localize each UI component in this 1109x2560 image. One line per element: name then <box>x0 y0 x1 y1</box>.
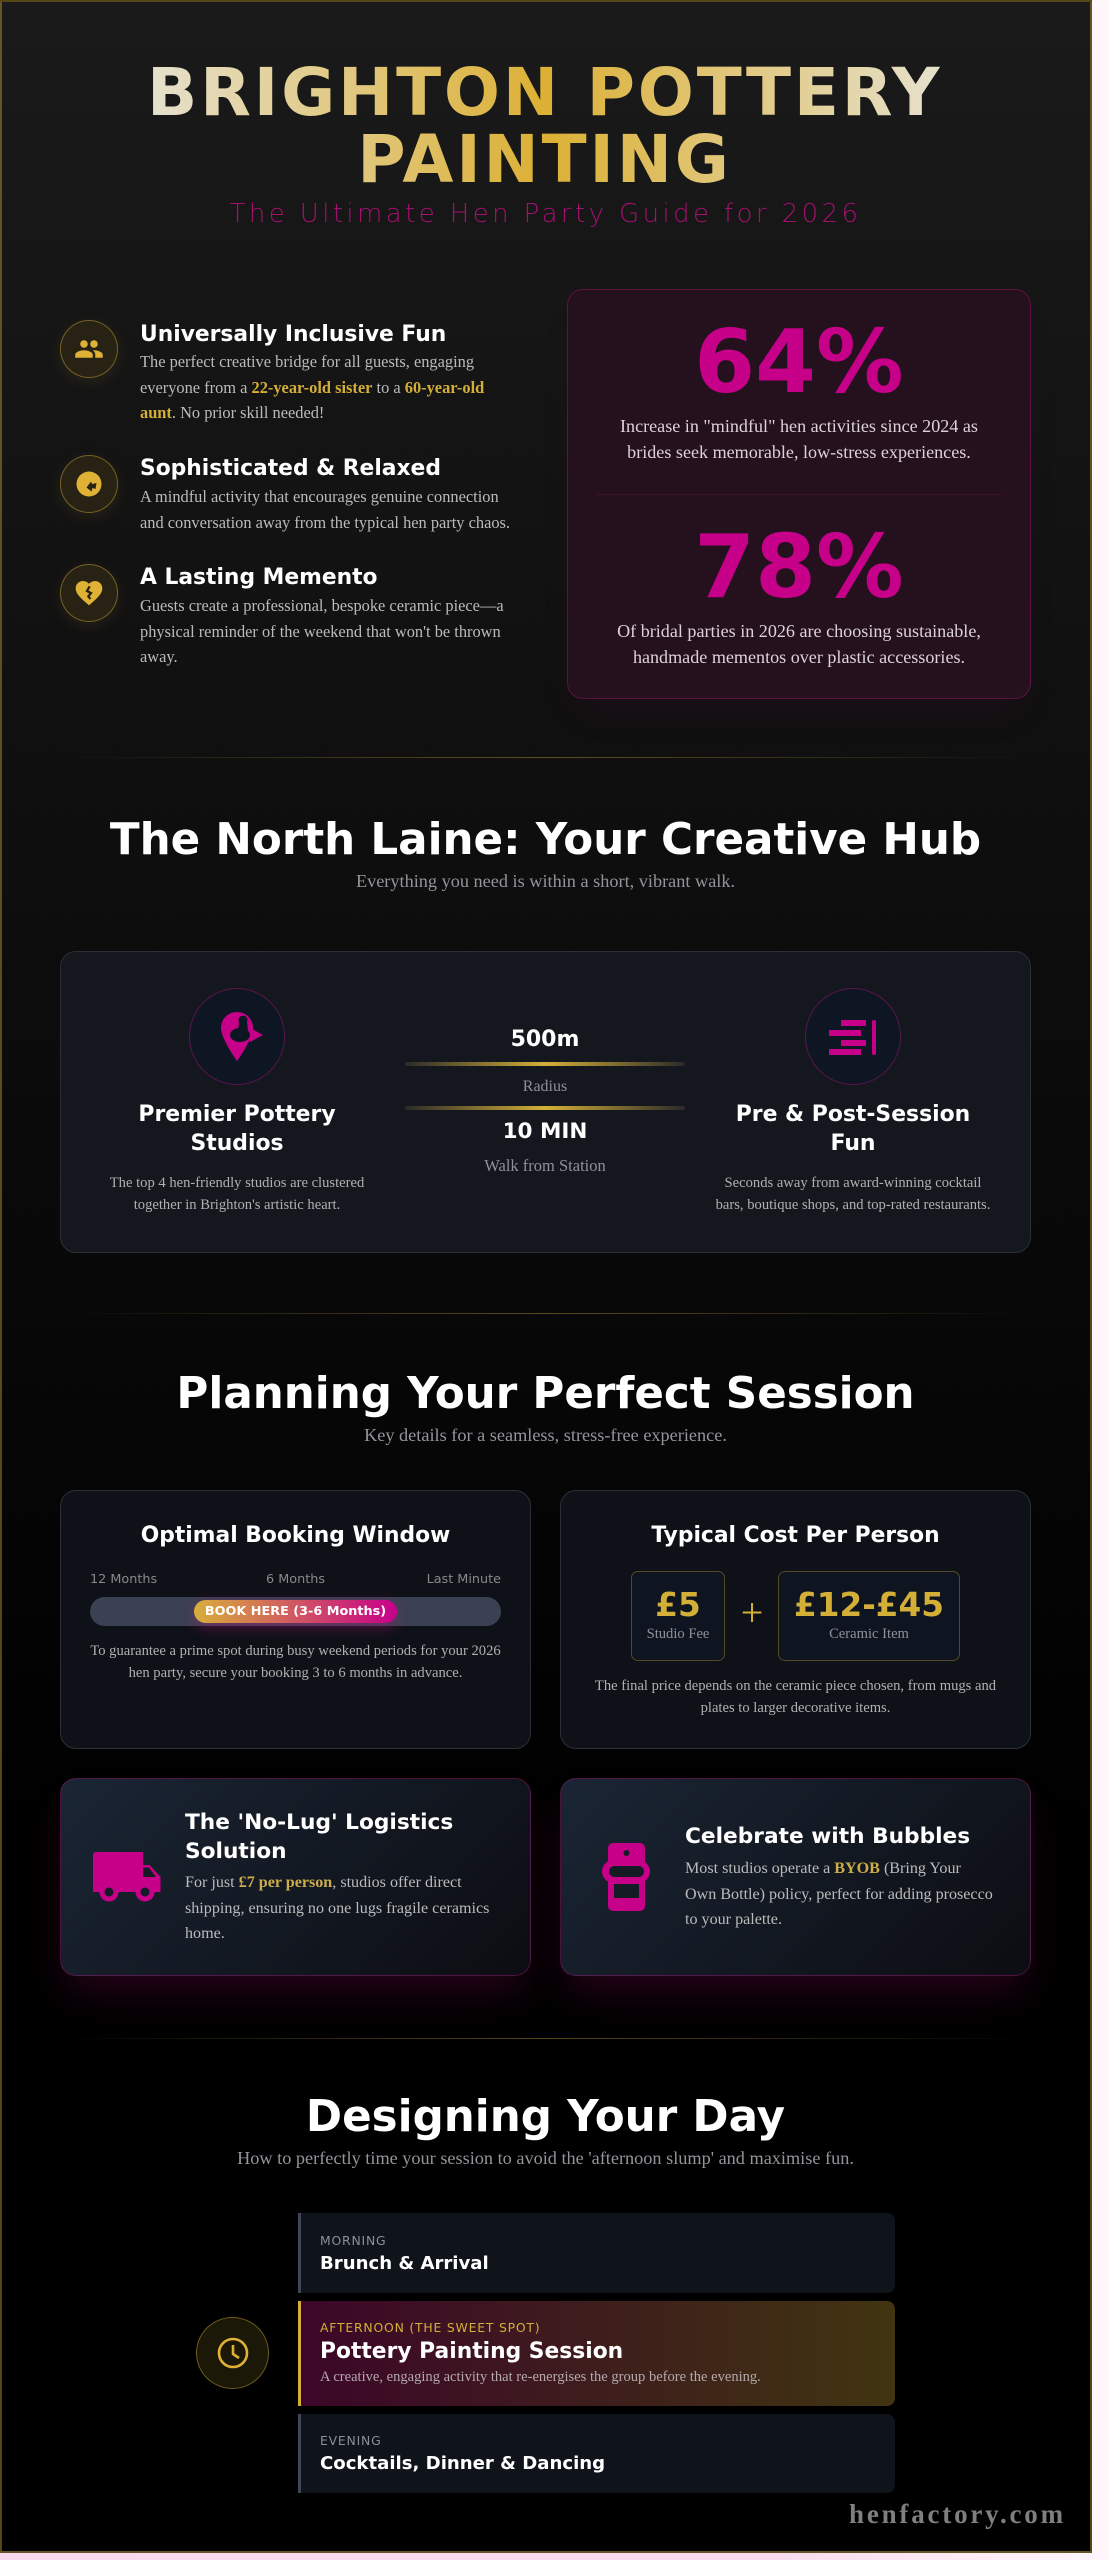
title: Pottery Painting Session <box>320 2339 623 2364</box>
text: The perfect creative bridge for all guests, engaging <box>140 352 474 371</box>
section heading: planning <box>176 1368 915 1445</box>
main title <box>147 59 942 193</box>
heading <box>185 1810 453 1864</box>
benefit: sophisticated and relaxed <box>60 455 510 532</box>
heading: studios: Studios <box>190 1131 284 1156</box>
timeline labels <box>90 1572 501 1587</box>
subtitle: The Ultimate Hen Party Guide for 2026 <box>230 199 861 229</box>
benefit: a lasting memento <box>60 564 504 666</box>
explanation: The final price depends on the ceramic piece chosen, from mugs and <box>595 1678 996 1694</box>
text: For just £7 per person, studios offer direct <box>185 1874 462 1891</box>
heading: studios <box>138 1102 336 1156</box>
timeline item: afternoon <box>298 2301 895 2406</box>
heading: fun: Fun <box>830 1131 876 1156</box>
explanation: plates to larger decorative items. <box>701 1700 890 1716</box>
title: Cocktails, Dinner & Dancing <box>320 2452 605 2474</box>
icon: venue menu <box>805 988 901 1085</box>
panel: cost per person <box>560 1490 1031 1749</box>
text: fun <box>716 1175 990 1213</box>
heading: The North Laine: Your Creative Hub <box>110 814 981 864</box>
icon: bottle <box>602 1843 650 1911</box>
main title: BRIGHTON POTTERY <box>147 54 942 131</box>
watermark: henfactory.com <box>849 2499 1066 2529</box>
timeline labels: 12 Months <box>90 1572 157 1587</box>
text: Most studios operate a BYOB (Bring Your <box>685 1860 961 1877</box>
timeline item: evening <box>298 2414 895 2493</box>
section heading: designing <box>237 2092 854 2168</box>
stat text: sustainable: handmade mementos over plastic accessories. <box>633 647 965 667</box>
stat: 78%: 78% <box>694 516 904 618</box>
text: studios: The top 4 hen-friendly studios are clustered <box>110 1175 364 1191</box>
text <box>185 1874 489 1942</box>
ceramic item <box>778 1571 960 1661</box>
title: Brunch & Arrival <box>320 2252 489 2274</box>
studio fee <box>631 1571 725 1661</box>
text: everyone from a 22-year-old sister to a 60-year-old <box>140 378 484 397</box>
heading: A Lasting Memento <box>140 564 378 590</box>
label: walk from station: Walk from Station <box>484 1156 606 1175</box>
panel: logistics <box>60 1778 531 1976</box>
booking highlight <box>194 1600 397 1623</box>
text: and conversation away from the typical hen party chaos. <box>140 513 510 532</box>
label: MORNING <box>320 2232 386 2248</box>
amount: £12-£45 <box>794 1586 944 1624</box>
subheading: How to perfectly time your session to avoid the 'afternoon slump' and maximise fun. <box>237 2148 854 2168</box>
timeline labels: 6 Months <box>266 1572 325 1587</box>
heading: Typical Cost Per Person <box>651 1523 940 1548</box>
amount: £5 <box>655 1586 701 1624</box>
booking highlight: BOOK HERE (3-6 Months) <box>205 1604 386 1619</box>
icon: broken heart <box>60 564 118 622</box>
subheading: Key details for a seamless, stress-free experience. <box>364 1425 727 1445</box>
description: A creative, engaging activity that re-energises the group before the evening. <box>320 2369 761 2385</box>
subheading: Everything you need is within a short, vibrant walk. <box>356 871 735 891</box>
panel: byob <box>560 1778 1031 1976</box>
text: fun: Seconds away from award-winning cocktail <box>725 1175 981 1191</box>
label: radius: Radius <box>523 1078 567 1095</box>
timeline item: morning <box>298 2213 895 2293</box>
explanation <box>595 1678 996 1716</box>
timeline bar <box>90 1597 501 1626</box>
text <box>685 1860 993 1928</box>
heading: The 'No-Lug' Logistics <box>185 1810 453 1835</box>
text: aunt. No prior skill needed! <box>140 403 324 422</box>
icon: truck <box>93 1852 160 1902</box>
label: Studio Fee <box>647 1626 709 1642</box>
text: studios <box>110 1175 364 1213</box>
heading: studios: Premier Pottery <box>138 1102 336 1127</box>
section heading: north laine <box>110 814 981 891</box>
label: Ceramic Item <box>829 1626 909 1642</box>
panel: booking window <box>60 1490 531 1749</box>
stat text: sustainable <box>617 621 981 667</box>
plus: + <box>741 1590 763 1635</box>
explanation: hen party, secure your booking 3 to 6 months in advance. <box>129 1665 462 1681</box>
icon: map pin <box>189 988 285 1085</box>
explanation: To guarantee a prime spot during busy weekend periods for your 2026 <box>90 1643 501 1659</box>
stat text: mindful: brides seek memorable, low-stress experiences. <box>627 442 971 462</box>
heading: Celebrate with Bubbles <box>685 1824 970 1849</box>
heading: Optimal Booking Window <box>141 1523 450 1548</box>
text: fun: bars, boutique shops, and top-rated restaurants. <box>716 1197 990 1213</box>
icon: people <box>60 320 118 378</box>
panel: creative hub <box>60 951 1031 1253</box>
text: studios: together in Brighton's artistic heart. <box>134 1197 340 1213</box>
timeline: day plan <box>196 2213 895 2493</box>
stat: 10 min: 10 MIN <box>503 1119 587 1144</box>
benefit: universally inclusive fun <box>60 320 484 422</box>
label: AFTERNOON (THE SWEET SPOT) <box>320 2320 540 2334</box>
text <box>140 596 504 666</box>
panel: statistics <box>567 289 1031 699</box>
text: physical reminder of the weekend that won't be thrown <box>140 622 501 641</box>
heading: fun <box>736 1102 970 1156</box>
icon: cracked disc <box>60 455 118 513</box>
stat: 64%: 64% <box>694 311 904 413</box>
heading: Designing Your Day <box>306 2092 785 2142</box>
explanation <box>90 1643 501 1681</box>
stat text: sustainable: Of bridal parties in 2026 are choosing sustainable, <box>617 621 981 641</box>
text <box>140 487 510 532</box>
text: Own Bottle) policy, perfect for adding prosecco <box>685 1886 993 1903</box>
icon: clock <box>196 2317 269 2389</box>
text <box>140 352 484 422</box>
heading: Universally Inclusive Fun <box>140 322 446 346</box>
heading: Planning Your Perfect Session <box>176 1368 915 1418</box>
text: A mindful activity that encourages genuine connection <box>140 487 499 506</box>
heading: Solution <box>185 1839 287 1864</box>
heading: fun: Pre & Post-Session <box>736 1102 970 1127</box>
text: Guests create a professional, bespoke ceramic piece—a <box>140 596 504 615</box>
text: shipping, ensuring no one lugs fragile ceramics <box>185 1900 489 1917</box>
timeline labels: Last Minute <box>427 1572 501 1587</box>
main title: PAINTING <box>357 121 732 198</box>
text: home. <box>185 1925 225 1942</box>
text: away. <box>140 647 178 666</box>
stat: 500m: 500m <box>511 1027 579 1052</box>
stat text: mindful <box>620 416 978 462</box>
text: to your palette. <box>685 1911 782 1928</box>
stat text: mindful: Increase in "mindful" hen activities since 2024 as <box>620 416 978 436</box>
heading: Sophisticated & Relaxed <box>140 456 441 481</box>
title header <box>147 54 942 229</box>
label: EVENING <box>320 2432 382 2448</box>
